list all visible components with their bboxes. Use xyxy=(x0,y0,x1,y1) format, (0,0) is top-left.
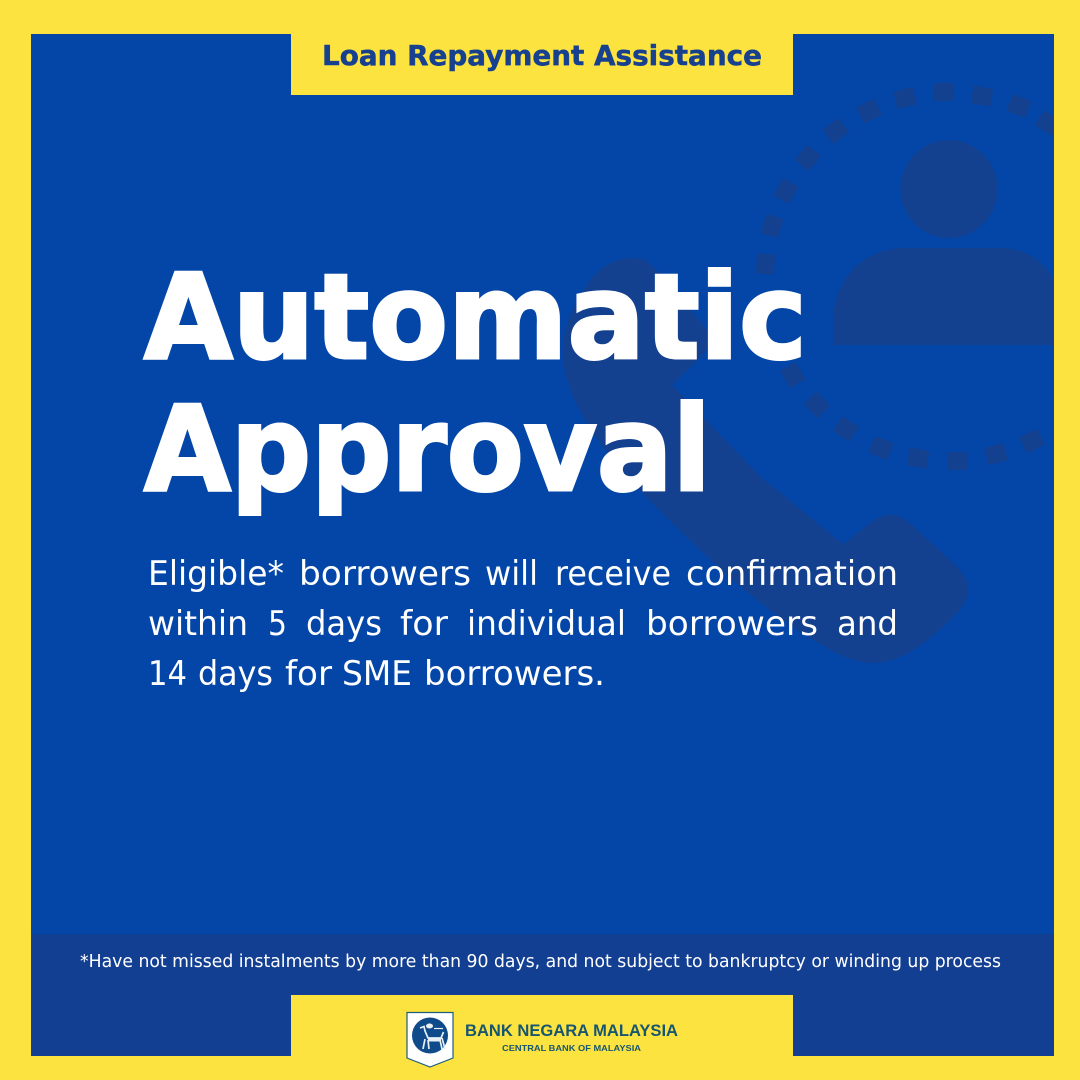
body text: 5 xyxy=(268,604,287,644)
body text: days xyxy=(306,604,382,644)
body text: SME xyxy=(342,654,412,694)
logo wordmark xyxy=(465,1022,678,1053)
footer band xyxy=(31,934,1054,1056)
icon: customer service person with handset xyxy=(563,83,1061,663)
title: Approval xyxy=(144,380,711,518)
body text: individual xyxy=(467,604,626,644)
body text: borrowers xyxy=(646,604,818,644)
title: Automatic xyxy=(144,248,807,386)
body text: within xyxy=(148,604,248,644)
bottom logo tab xyxy=(291,995,793,1080)
body text xyxy=(148,554,898,694)
header tab: Loan Repayment Assistance xyxy=(322,39,762,72)
body text: borrowers xyxy=(299,554,471,594)
logo wordmark: CENTRAL BANK OF MALAYSIA xyxy=(502,1043,641,1053)
icon: person body xyxy=(833,248,1054,345)
dotted ring xyxy=(756,83,1061,470)
icon: bank shield logo xyxy=(407,1012,453,1067)
icon: handset xyxy=(563,258,968,663)
body text: receive xyxy=(555,554,671,594)
title xyxy=(144,248,807,518)
body text: for xyxy=(400,604,448,644)
body text: for xyxy=(285,654,332,694)
body text: 14 xyxy=(148,654,187,694)
body text: days xyxy=(198,654,273,694)
body text: borrowers. xyxy=(424,654,605,694)
header tab xyxy=(291,34,793,95)
footnote: *Have not missed instalments by more than 90 days, and not subject to bankruptcy or winding up process xyxy=(80,952,1001,972)
body text: confirmation xyxy=(686,554,898,594)
body text: will xyxy=(485,554,538,594)
body text: Eligible* xyxy=(148,554,284,594)
body text: and xyxy=(837,604,898,644)
icon: person head xyxy=(900,140,998,238)
logo wordmark: BANK NEGARA MALAYSIA xyxy=(465,1022,678,1040)
